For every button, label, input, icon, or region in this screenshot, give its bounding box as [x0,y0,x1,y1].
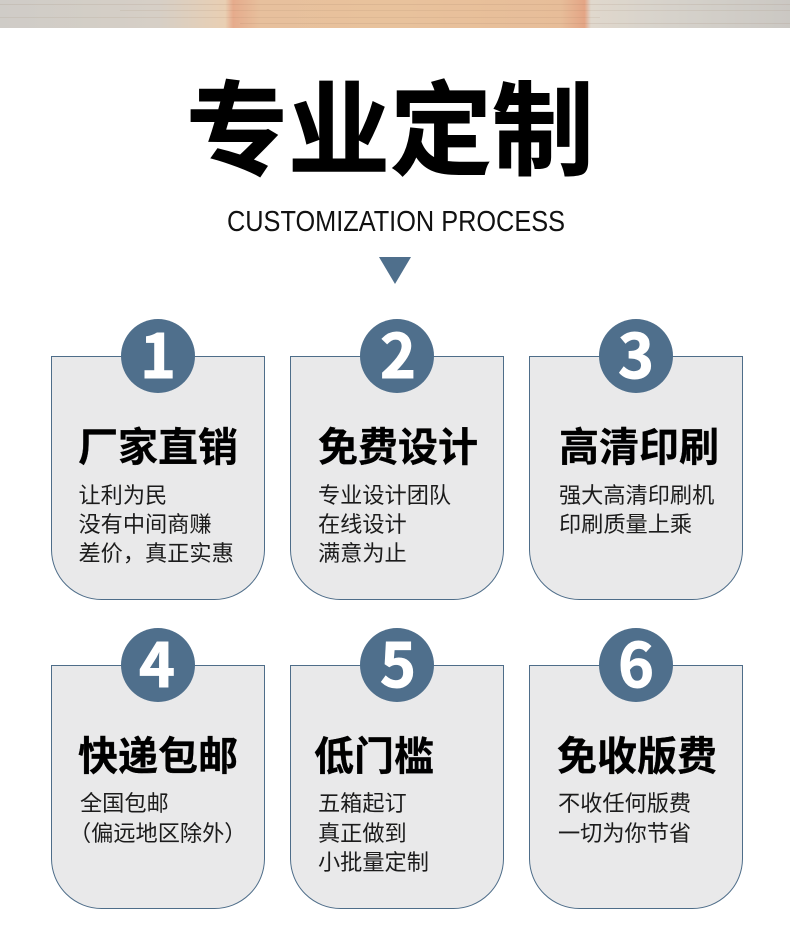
panel: step 6 no plate fee: 不收任何版费 [558,791,691,816]
panel: step 1 factory direct: 差价，真正实惠 [78,541,234,566]
panel: step 2 free design: 在线设计 [318,512,407,537]
panel: step 1 factory direct: 没有中间商赚 [78,512,212,537]
panel: step 2 free design: 专业设计团队 [318,483,451,508]
panel: step 5 low threshold: 低门槛 [314,735,434,779]
title: 专业定制 [186,75,594,189]
panel: step 6 no plate fee: 6 [618,616,654,705]
panel: step 2 free design: 免费设计 [318,426,478,470]
arrow: down triangle [379,257,411,284]
panel: step 4 express shipping: 全国包邮 [80,791,169,816]
panel: step 1 factory direct: 让利为民 [78,483,167,508]
panel: step 2 free design [290,307,504,600]
panel: step 1 factory direct: 1 [140,307,176,396]
panel: step 5 low threshold: 真正做到 [318,821,407,846]
panel: step 1 factory direct [52,307,264,600]
panel: step 4 express shipping: （偏远地区除外） [69,821,246,846]
panel: step 1 factory direct: 厂家直销 [78,426,238,470]
panel: step 2 free design: 满意为止 [318,541,407,566]
panel: step 6 no plate fee: 免收版费 [557,735,717,779]
panel: step 4 express shipping: 快递包邮 [78,735,238,779]
panel: step 5 low threshold: 5 [380,616,416,705]
panel: step 3 HD printing: 3 [618,307,654,396]
panel: step 5 low threshold: 五箱起订 [318,791,407,816]
top photo strip [0,0,790,28]
panel: step 3 HD printing: 印刷质量上乘 [559,512,692,537]
panel: step 5 low threshold [290,616,504,909]
panel: step 6 no plate fee: 一切为你节省 [558,821,691,846]
panel: step 4 express shipping [52,616,264,909]
subtitle: CUSTOMIZATION PROCESS [227,206,565,238]
panel: step 6 no plate fee [530,616,742,909]
panel: step 4 express shipping: 4 [139,616,175,705]
panel: step 2 free design: 2 [380,307,416,396]
panel: step 3 HD printing: 强大高清印刷机 [559,483,714,508]
panel: step 3 HD printing [530,307,742,600]
panel: step 3 HD printing: 高清印刷 [559,426,719,470]
panel: step 5 low threshold: 小批量定制 [318,850,429,875]
